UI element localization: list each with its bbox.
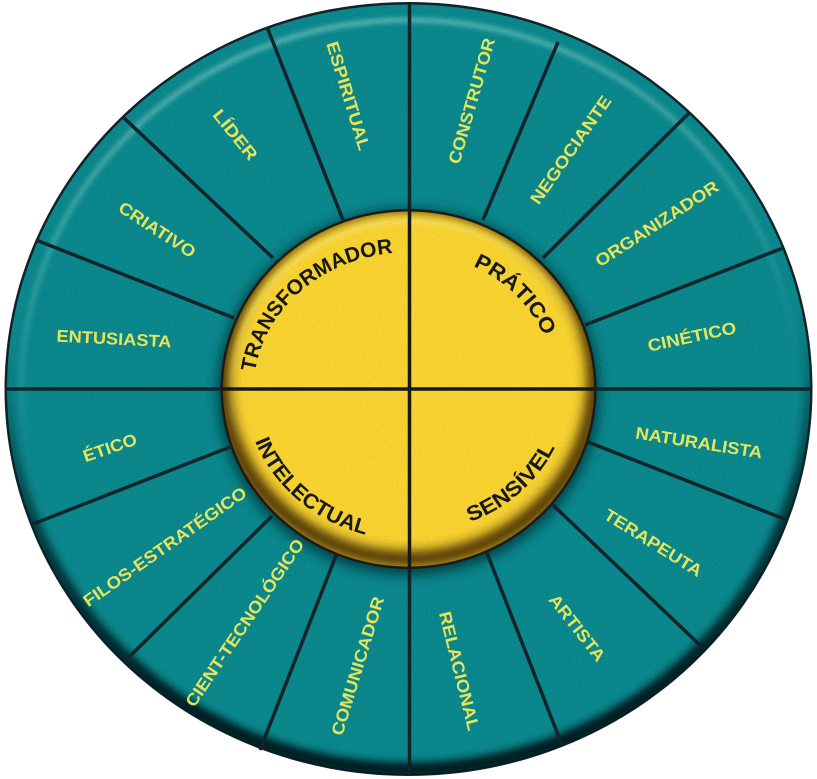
label: Naturalista: NATURALISTA — [634, 424, 764, 462]
quadrant label: Prático: PRÁTICO — [474, 254, 554, 333]
quadrant label: Intelectual: INTELECTUAL — [256, 436, 366, 535]
label: Entusiasta: ENTUSIASTA — [56, 327, 172, 351]
quadrant label: Transformador: TRANSFORMADOR — [240, 239, 392, 370]
label: Filos-Estratégico: FILOS-ESTRATÉGICO — [80, 483, 250, 611]
label: Espiritual: ESPIRITUAL — [322, 39, 374, 153]
label: Organizador: ORGANIZADOR — [592, 177, 722, 271]
central yellow disc — [220, 203, 596, 569]
label: Cient-Tecnológico: CIENT-TECNOLÓGICO — [182, 536, 308, 710]
label: Construtor: CONSTRUTOR — [445, 36, 499, 166]
label: Cinético: CINÉTICO — [646, 318, 738, 356]
label: Líder: LÍDER — [209, 106, 261, 164]
label: Comunicador: COMUNICADOR — [328, 594, 388, 738]
outer segment labels — [56, 36, 764, 738]
quadrant label: Sensível: SENSÍVEL — [466, 446, 555, 520]
label: Terapeuta: TERAPEUTA — [600, 505, 706, 581]
label: Criativo: CRIATIVO — [115, 198, 199, 262]
label: Negociante: NEGOCIANTE — [527, 92, 615, 208]
label: Artista: ARTISTA — [545, 591, 609, 665]
label: Relacional: RELACIONAL — [435, 610, 483, 732]
label: Ético: ÉTICO — [80, 430, 140, 466]
